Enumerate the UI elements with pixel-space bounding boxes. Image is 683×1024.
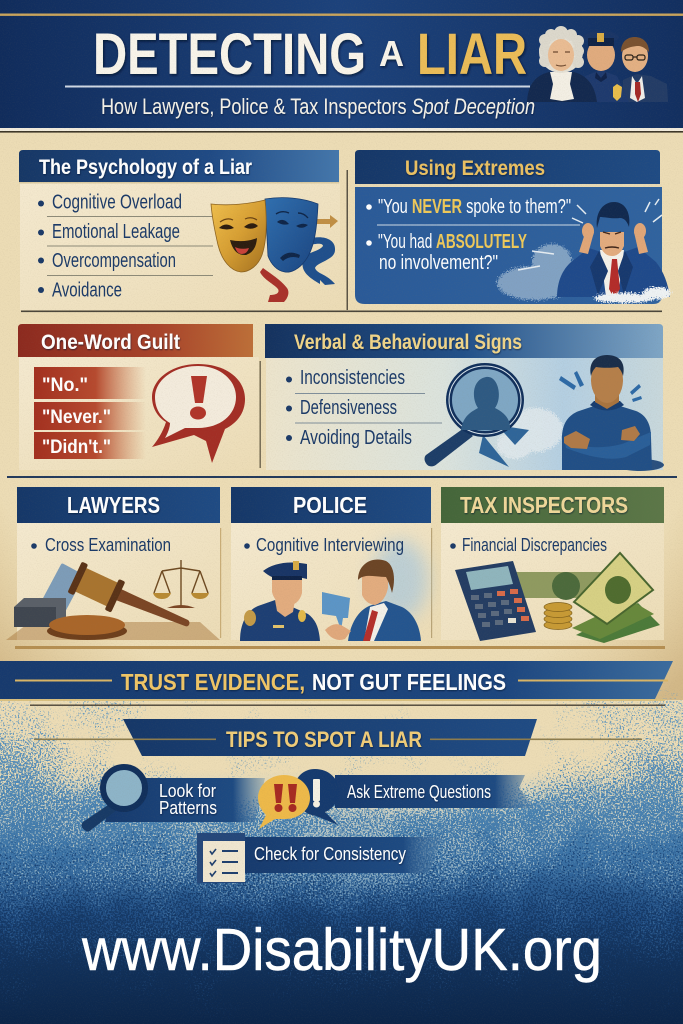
icon: calculator, coins and cash (455, 553, 660, 643)
bullet list: signs: Inconsistencies (300, 367, 405, 389)
panel: the psychology of a liar (19, 150, 340, 310)
panel heading: using extremes (355, 150, 661, 186)
icon: red exclamation speech bubble (152, 364, 245, 463)
panel heading: one-word guilt (18, 324, 253, 357)
bullet list: psychology: Avoidance (52, 280, 122, 302)
panel heading: tax inspectors: TAX INSPECTORS (460, 492, 628, 518)
red word tags: "No." (42, 375, 88, 396)
bullet list: signs: Defensiveness (300, 397, 397, 419)
red word tags (34, 367, 146, 459)
tip: check for consistency: Check for Consistency (254, 844, 406, 864)
banner: trust evidence: TRUST EVIDENCE, (121, 669, 305, 695)
banner: tips to spot a liar: TIPS TO SPOT A LIAR (226, 727, 422, 752)
bullet list: psychology: Cognitive Overload (52, 192, 182, 214)
bullet list: psychology (38, 192, 213, 302)
panel heading: psychology (19, 150, 339, 184)
icon: checklist clipboard (197, 833, 245, 883)
panel heading: one-word guilt: One-Word Guilt (41, 331, 180, 354)
red word tags: "Never." (42, 407, 111, 428)
bullet: cross examination: Cross Examination (45, 534, 171, 555)
tip: look for patterns: Patterns (159, 798, 217, 818)
extreme question quotes: "You had ABSOLUTELY (378, 231, 527, 253)
header banner (0, 0, 683, 133)
bullet: financial discrepancies: Financial Discrepancies (462, 534, 607, 555)
tip: look for patterns: Look for (159, 781, 216, 801)
icon: gavel, books and scales (6, 560, 220, 640)
page background (0, 507, 683, 1024)
panel heading: verbal and behavioural signs: Verbal & Behavioural Signs (294, 331, 522, 354)
red word tags: "Didn't." (42, 437, 111, 458)
panel heading: lawyers (17, 487, 220, 523)
icon: defensive person with crossed arms (559, 355, 664, 471)
bullet list: signs (286, 367, 442, 449)
panel: using extremes (346, 150, 671, 310)
banner: trust evidence (0, 661, 673, 706)
bullet list: psychology: Emotional Leakage (52, 221, 180, 243)
title: A (379, 33, 404, 74)
tip: look for patterns (82, 767, 265, 832)
banner: trust evidence: NOT GUT FEELINGS (312, 669, 506, 695)
subtitle: How Lawyers, Police & Tax Inspectors Spot Deception (101, 94, 535, 119)
panel heading: verbal and behavioural signs (265, 324, 663, 358)
extreme question quotes: "You NEVER spoke to them?" (378, 196, 571, 218)
website url: www.DisabilityUK.org (81, 917, 602, 983)
panel heading: lawyers: LAWYERS (67, 492, 160, 518)
icon: magnifying glass (82, 767, 145, 832)
bullet: financial discrepancies (450, 534, 607, 555)
icon: comedy and tragedy masks (211, 198, 338, 302)
title: LIAR (417, 22, 527, 87)
extreme question quotes (366, 196, 580, 274)
banner: tips to spot a liar (34, 719, 642, 756)
tip: ask extreme questions (258, 769, 535, 829)
title: DETECTING (93, 22, 366, 87)
icon: exclamation speech bubbles (258, 769, 339, 829)
panel: verbal and behavioural signs (265, 324, 664, 471)
bullet: cognitive interviewing: Cognitive Interviewing (256, 534, 404, 555)
extreme question quotes: no involvement?" (379, 252, 498, 274)
panel: police (231, 487, 432, 641)
panel heading: psychology: The Psychology of a Liar (39, 156, 252, 179)
icon: stressed man in suit (497, 199, 671, 303)
panel heading: tax inspectors (441, 487, 664, 523)
tip: check for consistency (197, 833, 443, 883)
icon: magnifying glass with silhouette (425, 366, 563, 467)
panel heading: police: POLICE (293, 492, 367, 518)
bullet list: psychology: Overcompensation (52, 250, 176, 272)
tip: ask extreme questions: Ask Extreme Questions (347, 782, 491, 802)
bullet list: signs: Avoiding Details (300, 427, 412, 449)
panel: tax inspectors (441, 487, 664, 643)
icon: police officer interviewing a man (240, 560, 421, 641)
panel heading: using extremes: Using Extremes (405, 157, 545, 180)
panel: lawyers (6, 487, 221, 640)
panel heading: police (231, 487, 431, 523)
panel: one-word guilt (18, 324, 261, 470)
icon: judge, police officer and inspector (527, 26, 668, 102)
